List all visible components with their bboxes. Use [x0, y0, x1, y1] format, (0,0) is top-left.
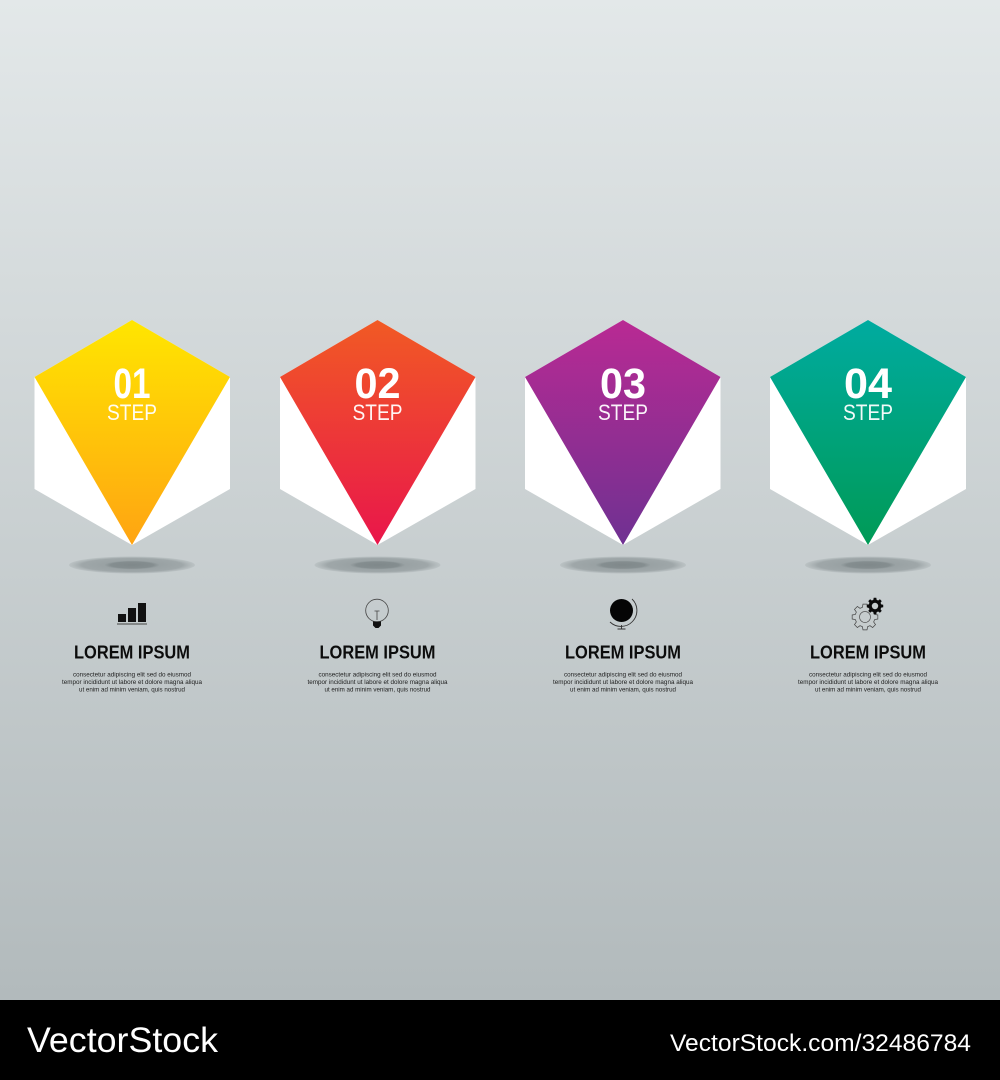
footer image id: VectorStock.com/32486784: [670, 1030, 971, 1057]
body text 02: tempor incididunt ut labore et dolore magna aliqua: [308, 679, 448, 686]
body text 03: [553, 672, 694, 694]
body text 01: tempor incididunt ut labore et dolore magna aliqua: [62, 679, 203, 686]
label step 02: STEP: [352, 400, 402, 425]
panel: step 02: [280, 320, 476, 694]
body text 04: ut enim ad minim veniam, quis nostrud: [815, 686, 922, 694]
shadow 01: [69, 556, 195, 574]
body text 03: consectetur adipiscing elit sed do eiusmod: [564, 672, 683, 678]
body text 03: ut enim ad minim veniam, quis nostrud: [570, 686, 677, 694]
body text 01: consectetur adipiscing elit sed do eiusmod: [73, 672, 192, 678]
icon: bar chart: [117, 603, 147, 624]
kite 04: [770, 320, 966, 545]
kite 01: [34, 320, 230, 545]
body text 02: ut enim ad minim veniam, quis nostrud: [324, 686, 431, 694]
footer bar: [0, 1000, 1000, 1080]
icon: globe: [610, 599, 637, 629]
white hexagon 02: [280, 320, 476, 545]
body text 01: [62, 672, 203, 694]
body text 02: consectetur adipiscing elit sed do eiusmod: [318, 672, 437, 678]
shadow 04: [805, 556, 931, 574]
panel: step 01: [34, 320, 230, 694]
white hexagon 04: [770, 320, 966, 545]
heading 01: LOREM IPSUM: [74, 642, 190, 662]
icon: gears: [852, 598, 883, 630]
label step 01: STEP: [107, 400, 157, 425]
heading 02: LOREM IPSUM: [320, 642, 436, 662]
kite 02: [280, 320, 476, 545]
body text 04: tempor incididunt ut labore et dolore magna aliqua: [798, 679, 939, 686]
body text 02: [308, 672, 448, 694]
white hexagon 01: [34, 320, 230, 545]
body text 03: tempor incididunt ut labore et dolore magna aliqua: [553, 679, 694, 686]
white hexagon 03: [525, 320, 720, 545]
number 03: 03: [600, 360, 646, 408]
footer logo text: VectorStock: [27, 1021, 219, 1060]
body text 01: ut enim ad minim veniam, quis nostrud: [79, 686, 186, 694]
number 01: 01: [114, 360, 150, 408]
body text 04: [798, 672, 939, 694]
label step 03: STEP: [598, 400, 648, 425]
number 02: 02: [354, 360, 400, 408]
shadow 03: [560, 556, 686, 574]
body text 04: consectetur adipiscing elit sed do eiusmod: [809, 672, 928, 678]
kite 03: [525, 320, 720, 545]
panel: step 03: [525, 320, 720, 694]
number 04: 04: [844, 360, 892, 408]
heading 04: LOREM IPSUM: [810, 642, 926, 662]
panel: step 04: [770, 320, 966, 694]
shadow 02: [314, 556, 440, 574]
icon: light bulb: [366, 599, 388, 628]
label step 04: STEP: [843, 400, 893, 425]
heading 03: LOREM IPSUM: [565, 642, 681, 662]
